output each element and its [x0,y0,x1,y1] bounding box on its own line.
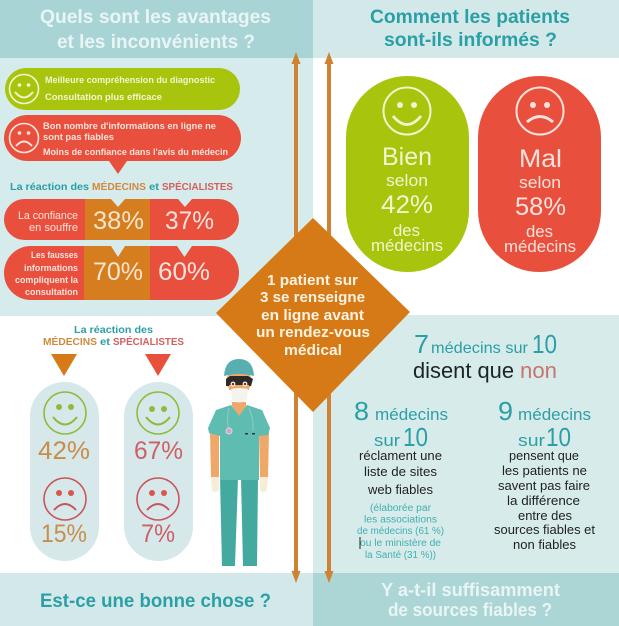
text block: seven doctors say no: 10 [532,329,557,359]
icon: orange down triangle [51,354,77,376]
text block: eight doctors request list: (élaborée par [370,503,432,514]
heading: lower reaction of doctors and specialists [43,324,184,348]
heading: advantages and disadvantages [0,0,313,58]
text block: nine doctors think: la différence [507,493,580,508]
panel: false information row: consultation [25,287,78,297]
panel: trust suffers row [4,199,239,240]
text block: seven doctors say no: médecins sur [431,340,529,357]
text block: seven doctors say no: disent que [413,358,514,383]
heading: enough reliable sources [313,573,619,626]
callout: central diamond: un rendez-vous [256,324,370,341]
arrow: right double arrow [324,52,334,583]
callout: central diamond: médical [284,342,342,359]
panel: false information row: Les fausses [31,250,78,260]
heading: enough reliable sources: de sources fiables ? [388,600,552,620]
panel: green "Bien" pill: selon [386,171,428,190]
gloves [211,477,219,492]
text block: nine doctors think: savent pas faire [498,478,590,493]
panel: green "Bien" pill: médecins [371,236,443,255]
icon: white smiley large [384,88,430,134]
hair [226,376,253,386]
text block: nine doctors think: sources fiables et [494,522,595,537]
heading: lower reaction of doctors and specialists: La réaction des [74,324,153,336]
text block: nine doctors think: les patients ne [502,463,587,478]
text block: eight doctors request list: 8 [354,396,369,426]
panel: advantages pill [5,68,240,110]
panel: false information row: 60% [158,258,210,286]
stethoscope [228,408,253,431]
panel: disadvantages pill: Moins de confiance dans l'avis du médecin [43,147,228,157]
panel: advantages pill: Meilleure compréhension du diagnostic [45,75,215,85]
text block: nine doctors think: 9 [498,396,513,426]
icon: doctor figure [208,359,270,566]
heading: reaction of doctors and specialists: et [149,181,160,193]
heading: advantages and disadvantages: Quels sont les avantages [40,7,271,28]
arms [210,432,219,478]
text block: eight doctors request list [354,396,448,561]
cap [224,359,254,376]
scrub top [208,405,270,480]
text block: nine doctors think: sur [518,431,545,450]
text block: seven doctors say no: non [520,358,557,383]
heading: how patients are informed: sont-ils informés ? [384,30,557,51]
icon: red sad face [44,478,86,520]
panel: false information row [4,246,239,300]
panel: green "Bien" pill [346,76,469,272]
text block: nine doctors think [494,396,595,552]
text block: seven doctors say no [413,329,557,383]
text block: nine doctors think: entre des [518,508,572,523]
icon: green smiley [44,392,86,434]
panel: red "Mal" pill: des [526,222,553,241]
face [226,368,252,394]
text block: nine doctors think: médecins [518,405,591,424]
icon: green smiley [137,392,179,434]
trousers [220,478,238,566]
text block: eight doctors request list: ou le ministère de [360,538,441,549]
text block: eight doctors request list: liste de sites [364,464,437,479]
arrow: left double arrow [292,52,300,583]
heading: advantages and disadvantages: et les inconvénients ? [57,32,255,53]
panel: disadvantages pill: Bon nombre d'informations en ligne ne [43,121,216,131]
text block: eight doctors request list: 10 [403,422,428,452]
heading: reaction of doctors and specialists: La réaction des [10,181,89,193]
eyes [231,382,235,386]
panel: green "Bien" pill: des [393,221,420,240]
panel: green "Bien" pill: Bien [382,143,432,171]
panel: specialists results pill: 67% [134,437,183,465]
icon: white sad face [10,124,38,152]
panel: false information row: informations [24,263,78,273]
neck [232,402,246,416]
callout: central diamond: 1 patient sur [267,272,358,289]
panel: false information row: 70% [93,258,143,286]
panel: doctors results pill: 15% [41,520,87,548]
heading: reaction of doctors and specialists: MÉDECINS [92,180,146,193]
panel: trust suffers row: en souffre [29,222,78,234]
heading: reaction of doctors and specialists: SPÉCIALISTES [162,180,233,193]
text block: eight doctors request list: réclament une [359,448,442,463]
icon: red down triangle [145,354,171,376]
heading: lower reaction of doctors and specialists: et [100,336,111,348]
text block: eight doctors request list: sur [374,431,400,450]
panel: specialists results pill [124,382,193,561]
text block: eight doctors request list: de médecins (61 %) [357,526,444,537]
icon: white smiley [10,74,38,104]
callout: central diamond: en ligne avant [261,307,364,324]
heading: how patients are informed: Comment les patients [370,7,570,28]
panel: trust suffers row: La confiance [18,210,78,222]
panel: disadvantages pill [4,115,241,174]
text block: nine doctors think: pensent que [509,448,579,463]
panel: red "Mal" pill: 58% [515,193,566,221]
panel: advantages background [0,58,313,316]
heading: enough reliable sources: Y a-t-il suffisamment [381,580,560,600]
panel: doctors results pill: 42% [38,437,90,465]
heading: is it a good thing [0,573,313,626]
panel: red "Mal" pill: médecins [504,237,576,256]
text block: eight doctors request list: les associations [364,514,437,526]
text block: nine doctors think: non fiables [513,537,576,552]
panel: trust suffers row: 37% [165,207,214,235]
text block: eight doctors request list: médecins [375,405,448,424]
text block: eight doctors request list: la Santé (31 %)) [365,550,436,561]
heading: reaction of doctors and specialists [10,180,233,193]
panel: red "Mal" pill [478,76,601,272]
heading: how patients are informed [313,0,619,58]
panel: false information row: compliquent la [15,275,79,285]
panel: doctors results pill [30,382,99,561]
text block: nine doctors think: 10 [546,422,571,452]
panel: specialists results pill: 7% [141,520,175,548]
panel: sources background [313,315,619,573]
heading: lower reaction of doctors and specialists: MÉDECINS [43,335,97,348]
panel: advantages pill: Consultation plus efficace [45,92,162,102]
heading: lower reaction of doctors and specialists: SPÉCIALISTES [113,335,184,348]
panel: green "Bien" pill: 42% [381,191,433,219]
panel: trust suffers row: 38% [93,207,144,235]
text block: eight doctors request list: web fiables [367,482,433,497]
callout: central diamond: 3 se renseigne [260,289,365,306]
panel: disadvantages pill: sont pas fiables [43,132,114,142]
icon: red sad face [137,478,179,520]
panel: red "Mal" pill: selon [519,173,561,192]
text block: seven doctors say no: 7 [414,329,429,359]
callout: central diamond [216,218,410,412]
mask [231,388,248,402]
icon: white sad face large [516,88,564,134]
heading: is it a good thing: Est-ce une bonne chose ? [40,591,271,612]
panel: red "Mal" pill: Mal [519,145,562,173]
